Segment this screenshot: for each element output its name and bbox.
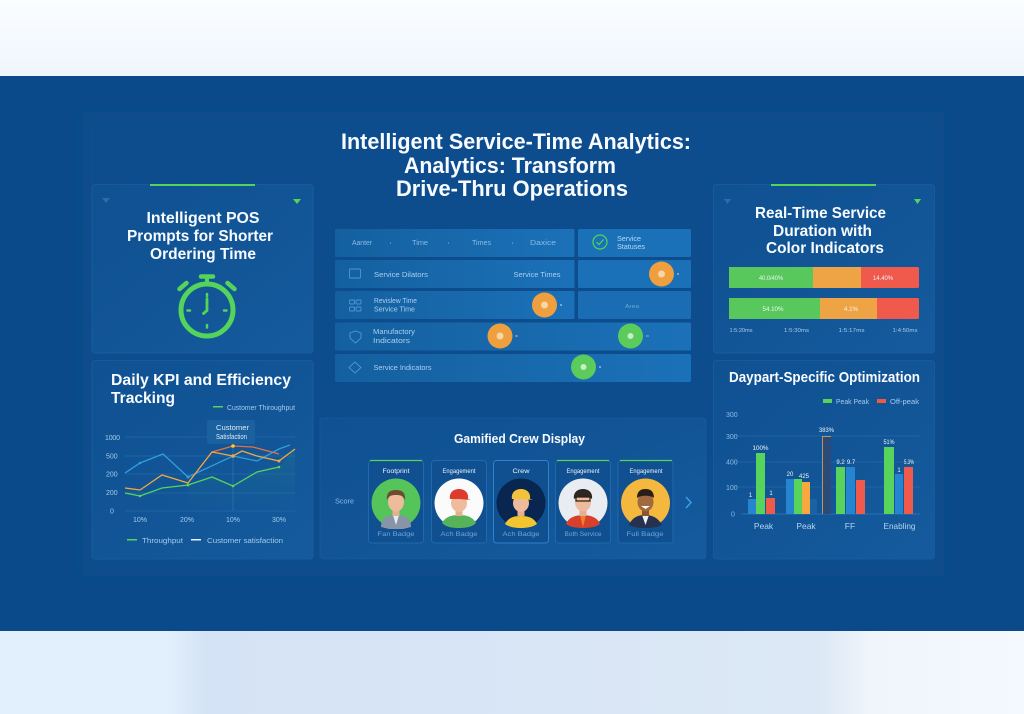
heading — [111, 372, 291, 407]
status dot orange — [532, 292, 562, 318]
value labels: 20 — [787, 472, 794, 478]
title: Analytics: Transform — [404, 153, 616, 178]
avatar — [434, 478, 484, 528]
tooltip — [207, 420, 255, 444]
heading — [127, 210, 273, 263]
row 1: Statuses — [617, 244, 646, 251]
category labels: Peak — [754, 521, 774, 531]
group 2 bars — [786, 436, 831, 514]
heading: Prompts for Shorter — [127, 228, 273, 245]
icon: calendar — [350, 269, 360, 278]
crew card 3 — [494, 460, 548, 543]
legend top: Customer Thiroughput — [227, 405, 295, 412]
icon: next chevron — [686, 497, 691, 508]
duration labels: 1:4:50ms — [892, 328, 918, 334]
x axis labels: 10% — [133, 517, 147, 524]
inner dashboard backdrop — [82, 112, 944, 576]
stacked bar 1 — [729, 267, 919, 288]
value labels: 51% — [884, 440, 895, 446]
y axis labels: 100 — [726, 485, 738, 492]
icon: diamond — [349, 362, 361, 373]
heading: Tracking — [111, 390, 175, 407]
crew card 3: Crew — [512, 469, 530, 475]
accent bar — [771, 184, 876, 186]
icon: devices — [350, 300, 361, 311]
status dot green — [618, 324, 649, 348]
row 4: Manufactory — [373, 327, 415, 336]
row 5: Service Indicators — [374, 363, 432, 372]
row 1: Aanter — [352, 240, 373, 247]
heading: Ordering Time — [150, 246, 256, 263]
row 2: Service Times — [514, 270, 561, 279]
series: blue — [125, 445, 290, 477]
row 1: Times — [472, 240, 492, 247]
value labels: 1 — [749, 493, 753, 499]
legend — [823, 399, 920, 406]
heading: Daypart-Specific Optimization — [729, 369, 920, 386]
tooltip: Satisfaction — [216, 434, 247, 441]
y axis labels — [726, 412, 738, 518]
heading: Daily KPI and Efficiency — [111, 372, 291, 389]
x axis labels: 10% — [226, 517, 240, 524]
avatar — [621, 478, 670, 528]
icon: stopwatch — [180, 276, 234, 336]
data points — [139, 444, 280, 497]
duration labels — [730, 328, 918, 334]
row 3 — [335, 291, 691, 319]
crew card 2: Engagement — [442, 469, 476, 475]
heading: Color Indicators — [766, 240, 884, 257]
marker right — [293, 199, 301, 204]
avatar — [372, 478, 420, 529]
crew card 1 — [368, 460, 424, 543]
avatar — [496, 478, 546, 528]
value labels: 425 — [799, 474, 810, 480]
duration labels: 1:5:17ms — [838, 328, 865, 334]
side label: Score — [335, 498, 354, 506]
heading: Intelligent POS — [146, 210, 260, 227]
value labels: 9.2 — [836, 460, 845, 466]
value labels: 9.7 — [847, 460, 856, 466]
category labels — [754, 521, 916, 531]
crew card 2: Ach Badge — [440, 531, 478, 538]
crew card 4: Engagement — [566, 469, 600, 475]
y axis labels: 300 — [726, 412, 738, 419]
y axis labels: 200 — [106, 472, 118, 478]
duration labels: 1:5:20ms — [730, 328, 753, 334]
marker left — [102, 198, 110, 203]
status dot orange — [649, 262, 679, 286]
row 4: Indicators — [373, 336, 410, 345]
panel: daily KPI tracking — [92, 360, 313, 559]
crew card 3: Ach Badge — [502, 531, 540, 538]
row 3: Revislew Time — [374, 296, 417, 305]
icon: shield — [350, 331, 361, 343]
duration labels: 1:5:30ms — [784, 328, 809, 334]
crew card 5 — [618, 460, 673, 543]
y axis labels: 1000 — [105, 435, 120, 442]
bar chart — [726, 412, 920, 531]
group 3 bars — [836, 467, 865, 514]
value labels: 100% — [752, 446, 769, 452]
status dot green — [571, 354, 601, 380]
value labels — [749, 428, 914, 499]
crew card 2 — [432, 460, 486, 543]
crew card 1: Footprint — [382, 469, 410, 475]
legend bottom: Customer satisfaction — [207, 538, 283, 545]
group 4 bars — [884, 447, 913, 514]
legend bottom: Throughput — [142, 538, 183, 545]
y axis labels: 500 — [106, 454, 118, 460]
y axis labels: 0 — [731, 512, 735, 518]
value labels: 383% — [819, 428, 835, 434]
y axis labels: 0 — [110, 508, 114, 516]
heading: Duration with — [773, 223, 872, 240]
category labels: Enabling — [884, 521, 916, 531]
row 1 — [335, 229, 691, 257]
crew card 5: Engagement — [630, 469, 663, 475]
category labels: FF — [845, 521, 855, 531]
row 3: Service Time — [374, 304, 415, 314]
x axis labels — [133, 517, 286, 524]
crew card 4: Both Service — [564, 531, 602, 538]
category labels: Peak — [796, 521, 816, 531]
row 3: Area — [625, 304, 639, 310]
heading: Real-Time Service — [755, 205, 886, 222]
x axis labels: 30% — [272, 517, 286, 524]
stacked bar 2: 4.1% — [844, 307, 859, 313]
y axis labels: 400 — [726, 460, 738, 466]
marker right — [914, 199, 921, 204]
panel: daypart-specific optimization — [714, 360, 934, 559]
legend: Off-peak — [890, 399, 920, 406]
value labels: 1 — [897, 468, 901, 474]
series: orange — [125, 449, 295, 490]
row 5 — [335, 354, 691, 382]
heading — [755, 205, 886, 257]
title: Intelligent Service-Time Analytics: — [341, 129, 691, 154]
y axis labels: 300 — [726, 434, 738, 441]
row 2: Service Dilators — [374, 270, 428, 279]
y axis labels: 200 — [106, 490, 118, 497]
value labels: 1 — [769, 491, 773, 497]
value labels: 5.3% — [904, 460, 914, 466]
row 1: Service — [617, 236, 641, 243]
tooltip: Customer — [216, 425, 250, 432]
legend: Peak Peak — [836, 399, 869, 406]
legend bottom — [127, 538, 283, 545]
row 1: Time — [412, 240, 428, 247]
crew card 1: Fan Badge — [378, 531, 415, 538]
y axis labels — [105, 435, 120, 516]
avatar — [558, 478, 608, 528]
stacked bar 2: 54.10% — [762, 307, 784, 313]
panel: real-time service duration — [714, 184, 934, 353]
main blue background — [0, 76, 1024, 631]
heading: Gamified Crew Display — [454, 432, 585, 446]
stacked bar 1: 40.0/40% — [759, 276, 784, 282]
page bottom band — [0, 631, 1024, 714]
series: red orange — [212, 446, 279, 454]
series: green — [125, 467, 279, 496]
line chart — [105, 435, 295, 524]
row 4 — [335, 322, 691, 350]
title: Drive-Thru Operations — [396, 176, 628, 201]
panel: intelligent POS prompts — [92, 184, 313, 353]
panel: gamified crew display — [320, 418, 706, 559]
marker left — [724, 199, 731, 204]
title — [341, 129, 691, 201]
panel: service status rows — [335, 229, 691, 382]
page top band — [0, 0, 1024, 76]
crew card 5: Full Badge — [626, 531, 664, 538]
x axis labels: 20% — [180, 517, 194, 524]
status dot orange — [488, 324, 518, 348]
accent bar — [150, 184, 255, 186]
group 1 bars — [748, 453, 775, 514]
row 2 — [335, 260, 691, 288]
icon: check circle — [593, 235, 607, 249]
stacked bar 2 — [729, 298, 919, 319]
crew card 4 — [556, 460, 610, 543]
row 1: Daxice — [530, 240, 556, 247]
stacked bar 1: 14.40% — [873, 276, 894, 282]
